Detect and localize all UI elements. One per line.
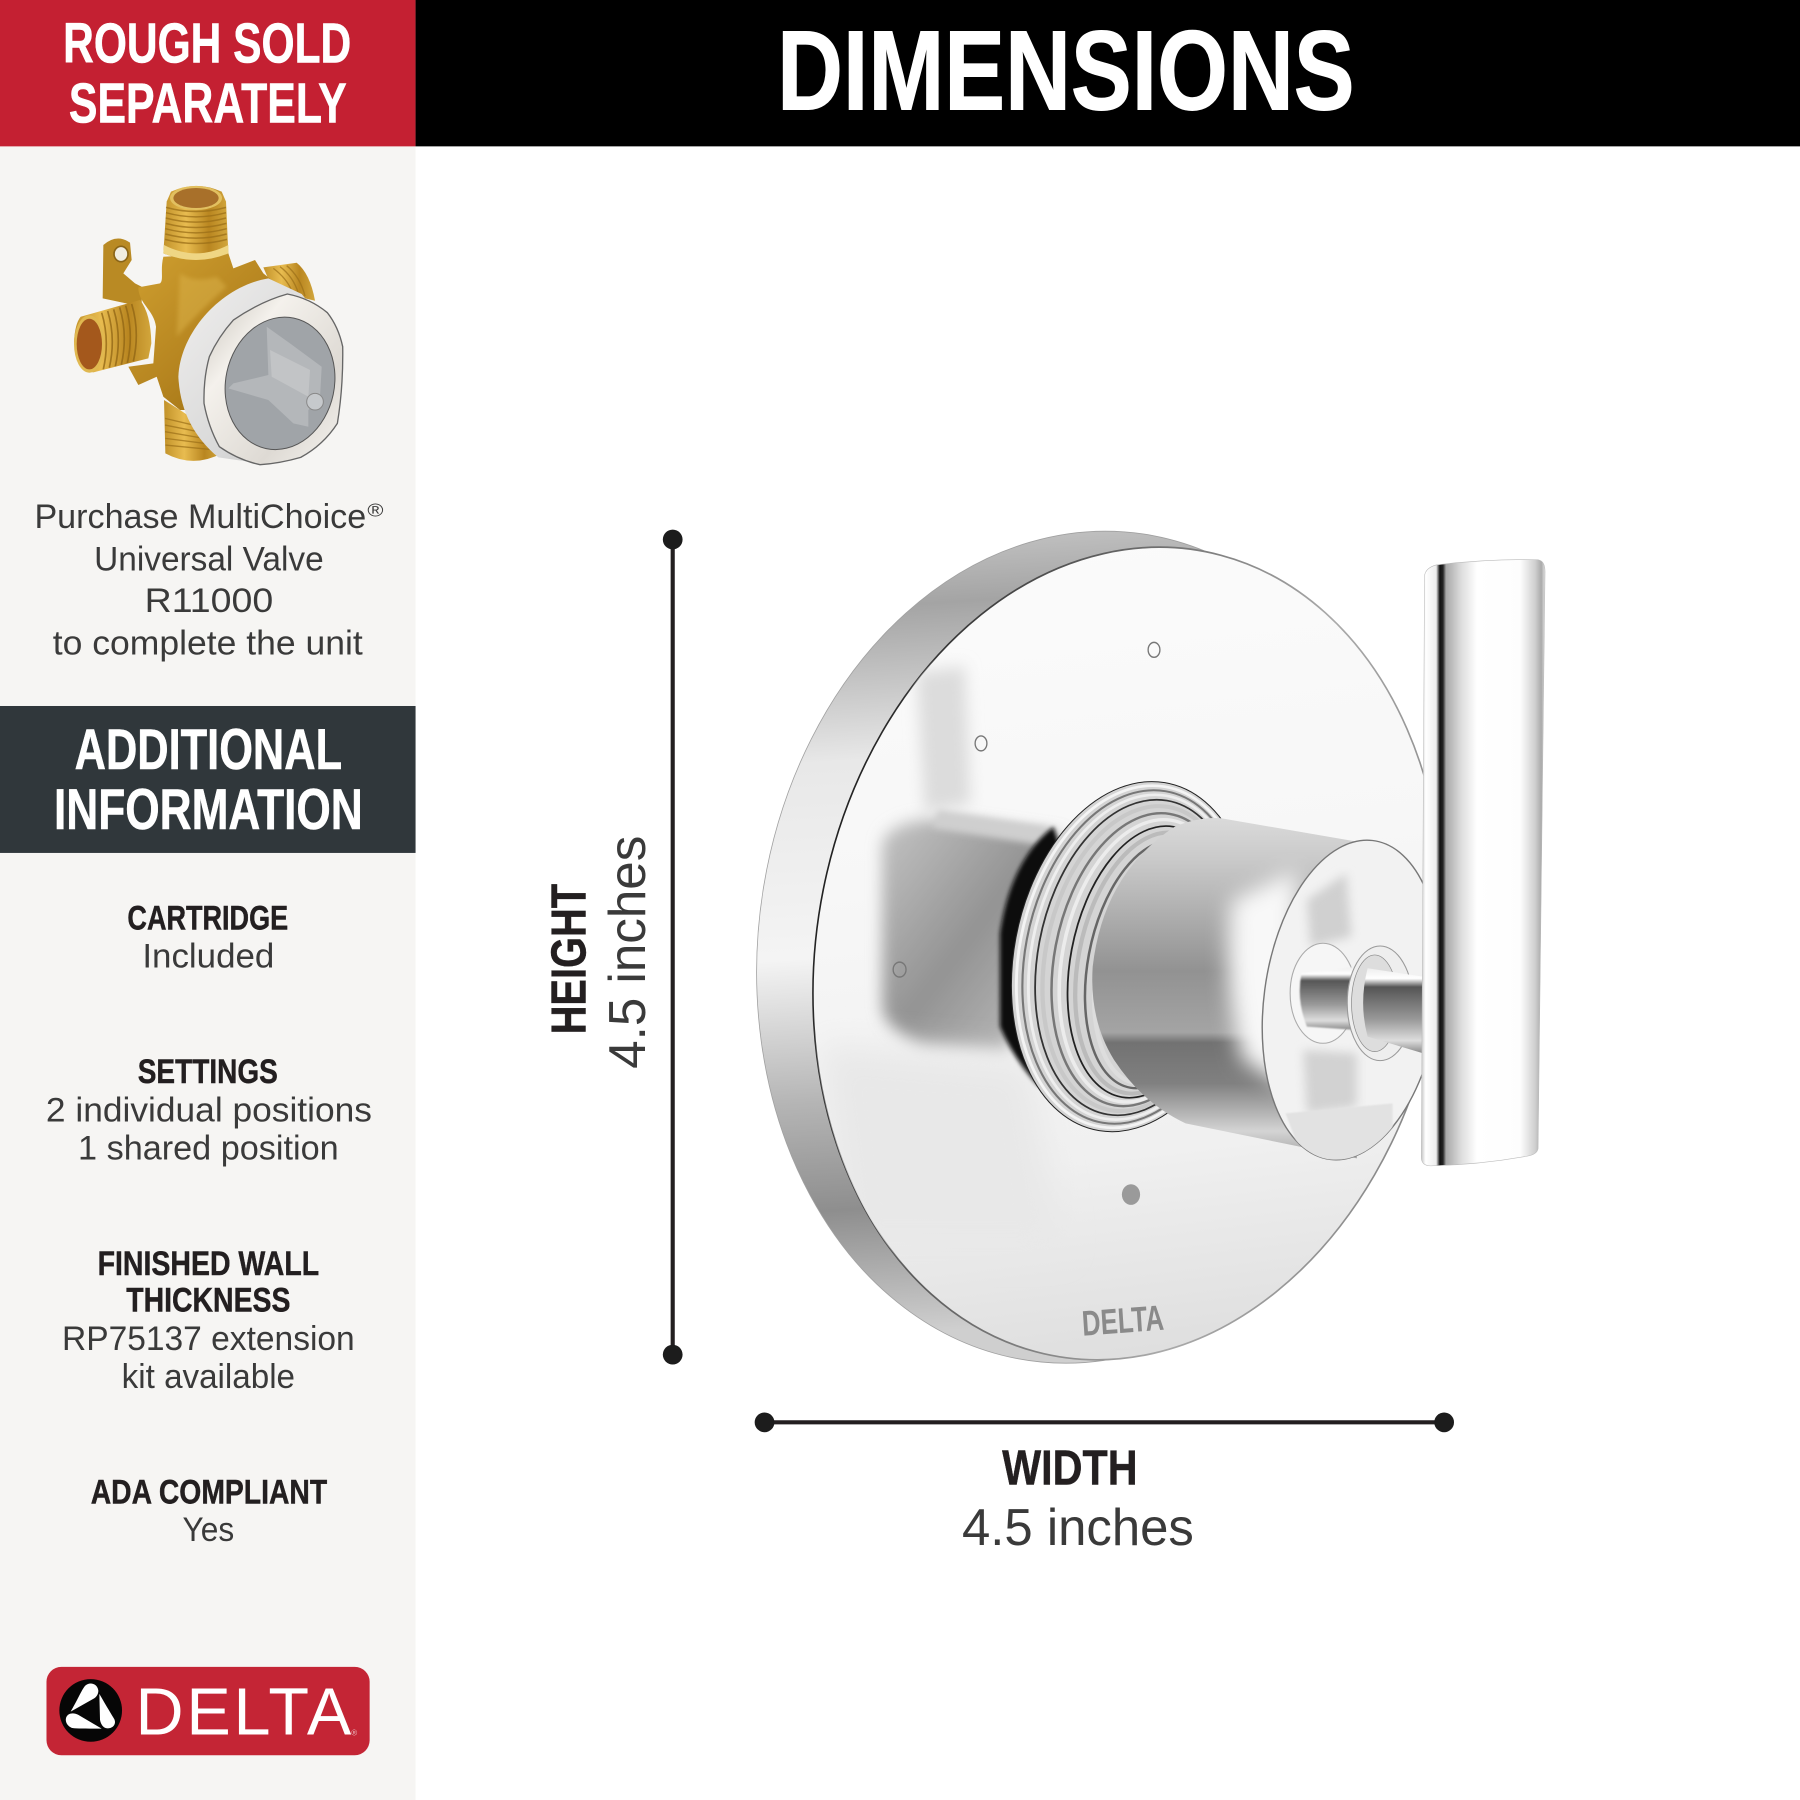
cap reflections — [1285, 873, 1393, 1160]
stem base — [1290, 943, 1356, 1043]
dimensions title bar: DIMENSIONS — [777, 8, 1355, 135]
additional information heading: INFORMATION — [54, 778, 363, 842]
info: ada compliant: Yes — [183, 1511, 234, 1549]
image: chrome diverter trim — [756, 530, 1546, 1364]
top pipe — [163, 186, 228, 260]
body highlight — [1228, 870, 1296, 1093]
width label: 4.5 inches — [962, 1498, 1194, 1556]
height label: HEIGHT — [541, 884, 596, 1034]
plate logo text: DELTA — [1081, 1299, 1165, 1344]
info: settings: SETTINGS — [138, 1053, 278, 1091]
rim — [696, 475, 1475, 1419]
hex nut — [204, 294, 343, 465]
sidebar panel — [0, 0, 416, 1800]
info: ada compliant — [91, 1473, 327, 1549]
info: settings: 1 shared position — [78, 1129, 339, 1167]
hub shadow — [1000, 827, 1064, 1087]
collar — [1347, 946, 1413, 1061]
info: settings: 2 individual positions — [46, 1092, 372, 1130]
height label: 4.5 inches — [598, 836, 656, 1069]
cert mark — [1122, 1184, 1140, 1205]
valve purchase note: R11000 — [145, 582, 273, 620]
hub and lever body — [996, 781, 1423, 1160]
height label — [541, 836, 656, 1069]
dimensions title bar — [416, 0, 1800, 146]
left pipe — [74, 300, 151, 372]
delta logo: ® — [351, 1729, 357, 1738]
valve purchase note — [34, 498, 384, 662]
right pipe — [263, 263, 315, 301]
delta logo: DELTA — [135, 1676, 352, 1750]
end cap — [1244, 831, 1459, 1169]
valve purchase note: ® — [367, 500, 384, 521]
body — [128, 253, 300, 410]
info: cartridge — [127, 899, 288, 976]
height dimension line — [663, 530, 683, 1364]
rough sold separately banner: ROUGH SOLD — [63, 12, 351, 75]
screw holes — [893, 642, 1160, 977]
hub rings — [983, 764, 1281, 1150]
inner gray — [213, 307, 347, 460]
info: settings — [46, 1053, 372, 1167]
additional information heading — [0, 706, 416, 853]
image: brass rough-in valve — [74, 186, 347, 465]
info: cartridge: Included — [142, 938, 274, 976]
lever handle — [1421, 560, 1545, 1166]
lever body — [1092, 818, 1357, 1158]
faceplate — [734, 475, 1522, 1432]
bracket — [103, 239, 142, 307]
width label — [962, 1440, 1194, 1556]
info: cartridge: CARTRIDGE — [127, 899, 288, 937]
info: finished wall thickness: kit available — [122, 1358, 295, 1396]
rough sold separately banner: SEPARATELY — [69, 71, 347, 134]
info: finished wall thickness: FINISHED WALL — [98, 1245, 319, 1283]
bottom pipe — [164, 400, 222, 461]
valve purchase note: Universal Valve — [94, 541, 324, 579]
plate reflections — [820, 667, 1061, 1246]
additional information heading: ADDITIONAL — [75, 718, 342, 782]
width label: WIDTH — [1002, 1440, 1138, 1495]
info: finished wall thickness: THICKNESS — [126, 1282, 290, 1320]
width dimension line — [755, 1412, 1454, 1432]
info: finished wall thickness — [62, 1245, 355, 1396]
rough sold separately banner — [0, 0, 416, 146]
stem rod — [1363, 968, 1423, 1053]
info: ada compliant: ADA COMPLIANT — [91, 1473, 327, 1511]
valve purchase note: to complete the unit — [53, 624, 363, 662]
delta logo — [46, 1667, 370, 1755]
info: finished wall thickness: RP75137 extension — [62, 1320, 355, 1358]
white ring — [178, 278, 343, 463]
valve purchase note: Purchase MultiChoice — [34, 498, 366, 536]
